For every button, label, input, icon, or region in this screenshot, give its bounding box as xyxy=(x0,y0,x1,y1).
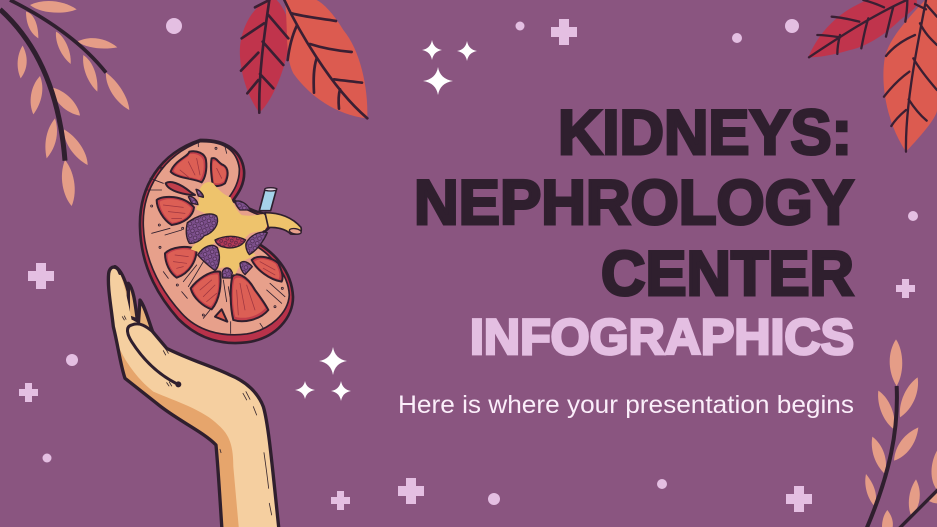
pyramid striations xyxy=(163,158,275,315)
icon: red leaves top-right xyxy=(808,0,937,152)
subtitle: Here is where your presentation begins xyxy=(398,391,854,419)
title: NEPHROLOGY xyxy=(414,168,854,238)
thumb crease xyxy=(127,324,179,385)
title: CENTER xyxy=(601,239,854,309)
ureter xyxy=(259,188,302,235)
icon: red leaves top centre xyxy=(240,0,367,118)
back fingers xyxy=(115,267,153,332)
sparkle stars near hand xyxy=(295,347,351,401)
icon: branch bottom-right xyxy=(865,339,937,527)
hand outline xyxy=(108,267,279,527)
medullary clusters xyxy=(186,189,267,278)
shaded side of arm xyxy=(119,348,239,527)
heading: infographics: INFOGRAPHICS xyxy=(470,309,854,365)
kidney cortex xyxy=(143,142,289,335)
icon: kidney xyxy=(140,140,302,343)
title: KIDNEYS: xyxy=(558,98,852,168)
icon: branch top-left xyxy=(0,0,129,206)
icon: hand xyxy=(108,267,279,527)
pyramids xyxy=(157,151,283,322)
sparkle stars top xyxy=(422,40,477,95)
pyramid highlights xyxy=(160,154,279,318)
cortex marks xyxy=(147,142,285,333)
kidney body xyxy=(140,140,293,343)
renal pelvis xyxy=(191,182,271,275)
title xyxy=(414,98,854,309)
